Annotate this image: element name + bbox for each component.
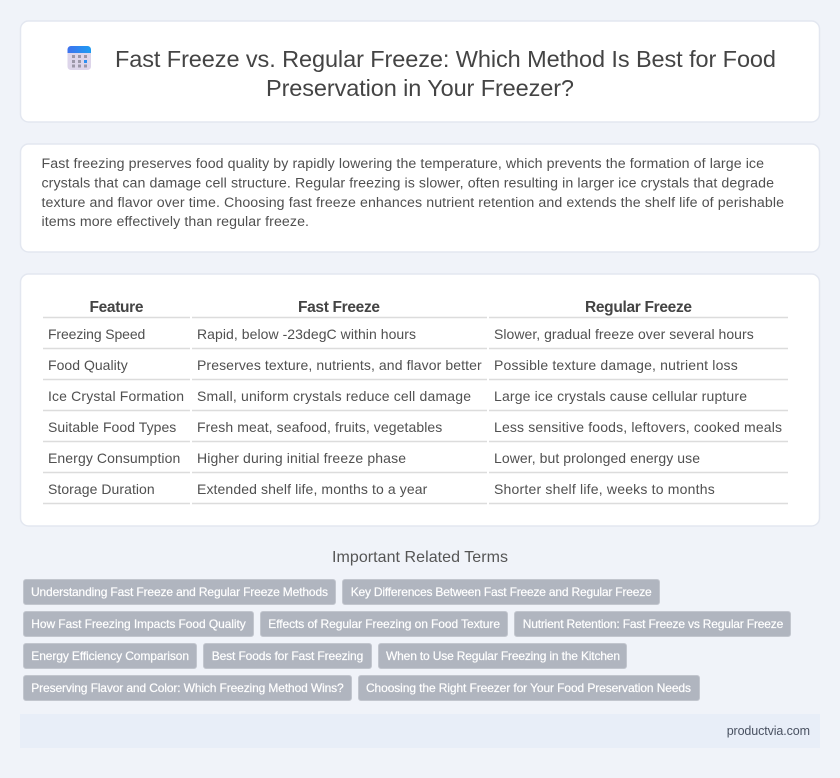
tag: Choosing the Right Freezer for Your Food Preservation Needs — [366, 681, 691, 695]
title: Preservation in Your Freezer? — [266, 75, 574, 101]
table header: Feature — [90, 299, 144, 316]
table header: Regular Freeze — [585, 299, 692, 316]
tag — [24, 580, 336, 604]
icon: calendar — [68, 46, 91, 70]
column: feature: Energy Consumption — [48, 450, 180, 466]
panel: introduction text: items more effectively than regular freeze. — [42, 214, 309, 230]
tag — [358, 676, 700, 700]
panel: introduction text: texture and flavor over time. Choosing fast freeze enhances nutrient retention and extends the shelf life of perishable — [42, 195, 784, 211]
table header: Fast Freeze — [298, 299, 380, 316]
column: fast freeze: Small, uniform crystals reduce cell damage — [197, 388, 471, 404]
column: regular freeze: Lower, but prolonged energy use — [494, 450, 700, 466]
panel: introduction text: crystals that can damage cell structure. Regular freezing is slower, often resulting in larger ice crystals that degrade — [42, 176, 774, 192]
column: fast freeze: Rapid, below -23degC within hours — [197, 326, 416, 342]
column: feature: Freezing Speed — [48, 326, 145, 342]
column: regular freeze: Slower, gradual freeze over several hours — [494, 326, 754, 342]
column: feature: Ice Crystal Formation — [48, 388, 184, 404]
column: fast freeze: Fresh meat, seafood, fruits, vegetables — [197, 419, 442, 435]
tag: How Fast Freezing Impacts Food Quality — [31, 617, 246, 631]
tag — [24, 644, 196, 668]
tag — [260, 612, 508, 636]
tag — [378, 644, 626, 668]
title: Fast Freeze vs. Regular Freeze: Which Method Is Best for Food — [115, 46, 776, 72]
related term tags — [24, 580, 790, 700]
column: regular freeze: Shorter shelf life, weeks to months — [494, 481, 715, 497]
tag: Effects of Regular Freezing on Food Texture — [268, 617, 500, 631]
column: regular freeze: Less sensitive foods, leftovers, cooked meals — [494, 419, 782, 435]
column: feature: Suitable Food Types — [48, 419, 176, 435]
column: fast freeze — [197, 326, 482, 497]
panel: introduction text: Fast freezing preserves food quality by rapidly lowering the temperature, which prevents the formation of large ice — [42, 156, 764, 172]
column: regular freeze: Large ice crystals cause cellular rupture — [494, 388, 747, 404]
tag: Best Foods for Fast Freezing — [212, 649, 363, 663]
tag — [204, 644, 372, 668]
panel: title header — [20, 21, 820, 122]
tag — [24, 612, 254, 636]
column: feature: Food Quality — [48, 357, 128, 373]
tag: Understanding Fast Freeze and Regular Freeze Methods — [31, 585, 328, 599]
tag — [514, 612, 790, 636]
footer: productvia.com — [727, 724, 810, 738]
tag: Energy Efficiency Comparison — [31, 649, 189, 663]
title — [115, 46, 776, 101]
column: fast freeze: Extended shelf life, months to a year — [197, 481, 428, 497]
table header — [90, 299, 692, 316]
column: fast freeze: Higher during initial freeze phase — [197, 450, 406, 466]
column: regular freeze — [494, 326, 782, 497]
column: fast freeze: Preserves texture, nutrients, and flavor better — [197, 357, 482, 373]
panel: comparison table — [20, 274, 820, 526]
tag: When to Use Regular Freezing in the Kitchen — [386, 649, 620, 663]
column: feature: Storage Duration — [48, 481, 155, 497]
tag — [342, 580, 660, 604]
column: feature — [48, 326, 184, 497]
tag: Preserving Flavor and Color: Which Freezing Method Wins? — [31, 681, 344, 695]
panel: introduction text — [20, 144, 820, 252]
tag — [24, 676, 352, 700]
footer — [20, 714, 820, 748]
column: regular freeze: Possible texture damage, nutrient loss — [494, 357, 738, 373]
tag: Nutrient Retention: Fast Freeze vs Regular Freeze — [523, 617, 784, 631]
tag: Key Differences Between Fast Freeze and Regular Freeze — [351, 585, 652, 599]
heading: related terms: Important Related Terms — [332, 549, 508, 566]
